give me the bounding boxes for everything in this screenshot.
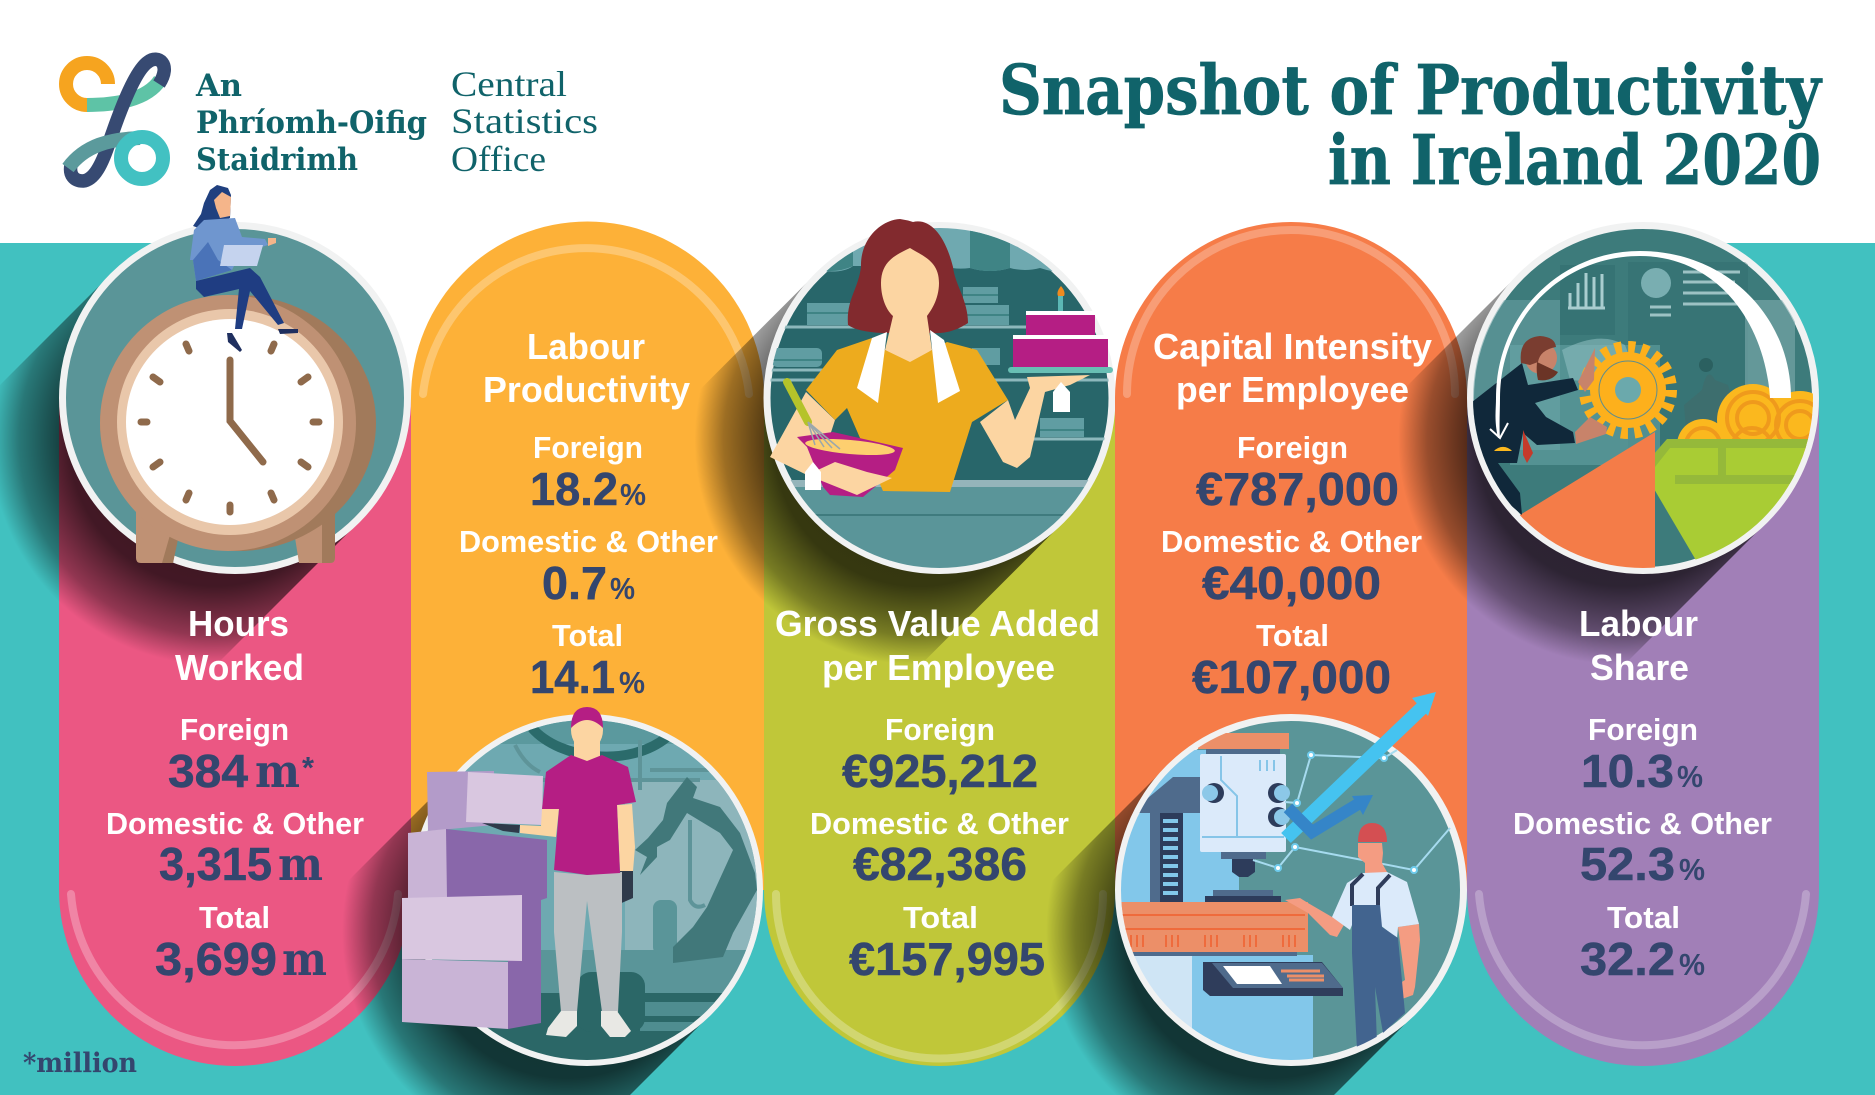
illustration: bakery backdrop [770,228,1109,568]
logo text: English name [451,64,598,179]
text: labour productivity: Foreign [533,430,643,465]
panel: hours worked [0,185,411,1066]
icon: stacked boxes [402,771,547,1029]
text: hours worked: m [282,932,327,986]
text: hours worked: 3,315 [159,838,272,890]
text: gross value added: per Employee [822,647,1055,688]
text: hours worked: Worked [175,647,304,688]
text: hours worked: Total [199,900,270,935]
logo text: English name: Office [451,139,546,179]
text: hours worked: Foreign [180,712,289,747]
text: capital intensity: Domestic & Other [1161,524,1422,559]
text: capital intensity: €787,000 [1196,463,1399,515]
text: capital intensity: Foreign [1237,430,1348,465]
text: labour share: 10.3 [1581,745,1674,797]
text: hours worked: * [302,750,315,785]
text: hours worked: m [255,744,300,798]
illustration: milling machine [1110,733,1343,1065]
text: capital intensity [1153,326,1432,703]
illustration: factory backdrop [428,720,757,1060]
logo text: English name: Statistics [451,101,598,141]
icon: growth arrows and network [1253,692,1450,873]
text: labour productivity [459,326,718,703]
text: hours worked: m [278,837,323,891]
text: capital intensity: Total [1256,618,1329,653]
text: labour productivity: Total [552,618,623,653]
text: labour productivity: Productivity [483,369,690,410]
logo text: Irish name: An [195,68,242,104]
text: gross value added [775,603,1100,985]
panel: labour productivity [345,222,764,1095]
text: labour share [1513,603,1772,985]
text: labour share: % [1679,852,1705,887]
icon: birthday cake [1008,286,1113,412]
logo text: Irish name [195,68,427,178]
icon: machine operator [1285,823,1420,1050]
text: labour share: % [1677,759,1703,794]
text: capital intensity: per Employee [1176,369,1409,410]
icon: baker [770,219,1090,497]
logo: CSO mark [66,59,164,181]
text: capital intensity: €40,000 [1202,557,1381,609]
logo text: English name: Central [451,64,567,104]
text: labour productivity: 0.7 [542,557,607,609]
text: gross value added: Domestic & Other [810,806,1069,841]
footnote: *million [23,1048,137,1079]
text: gross value added: Total [903,900,978,935]
panel: gross value added [697,219,1115,1066]
icon: woman with laptop [190,185,298,352]
text: labour share: % [1679,947,1705,982]
background [0,222,1875,1095]
text: labour productivity: 14.1 [530,651,615,703]
text: labour productivity: % [610,571,635,606]
text: labour productivity: Labour [527,326,645,367]
title [999,51,1823,201]
panel: labour share [1400,222,1819,1066]
text: hours worked [106,603,364,986]
icon: warehouse worker [482,707,636,1037]
text: labour share: Share [1590,647,1689,688]
illustration: business dashboard backdrop [1470,262,1834,575]
text: labour productivity: 18.2 [530,463,618,515]
text: labour share: Labour [1579,603,1698,644]
text: hours worked: Hours [188,603,289,644]
text: gross value added: €925,212 [842,745,1038,797]
text: gross value added: Foreign [885,712,995,747]
text: hours worked: 384 [168,745,248,797]
icon: gear [1585,347,1671,433]
icon: businessman [1470,251,1791,515]
text: capital intensity: Capital Intensity [1153,326,1432,367]
text: capital intensity: €107,000 [1192,651,1391,703]
logo text: Irish name: Staidrimh [196,142,358,178]
panel: capital intensity [1050,222,1467,1095]
text: labour share: Total [1607,900,1680,935]
text: labour productivity: % [619,665,645,700]
text: gross value added: Gross Value Added [775,603,1100,644]
logo text: Irish name: Phríomh-Oifig [196,105,427,141]
text: hours worked: Domestic & Other [106,806,364,841]
text: labour share: 32.2 [1580,933,1675,985]
text: labour share: Domestic & Other [1513,806,1772,841]
text: labour productivity: Domestic & Other [459,524,718,559]
text: gross value added: €157,995 [849,933,1045,985]
text: labour share: Foreign [1588,712,1698,747]
text: hours worked: 3,699 [155,933,277,985]
text: labour productivity: % [620,477,646,512]
text: labour share: 52.3 [1580,838,1675,890]
icon: clock [100,295,376,563]
text: gross value added: €82,386 [853,838,1027,890]
